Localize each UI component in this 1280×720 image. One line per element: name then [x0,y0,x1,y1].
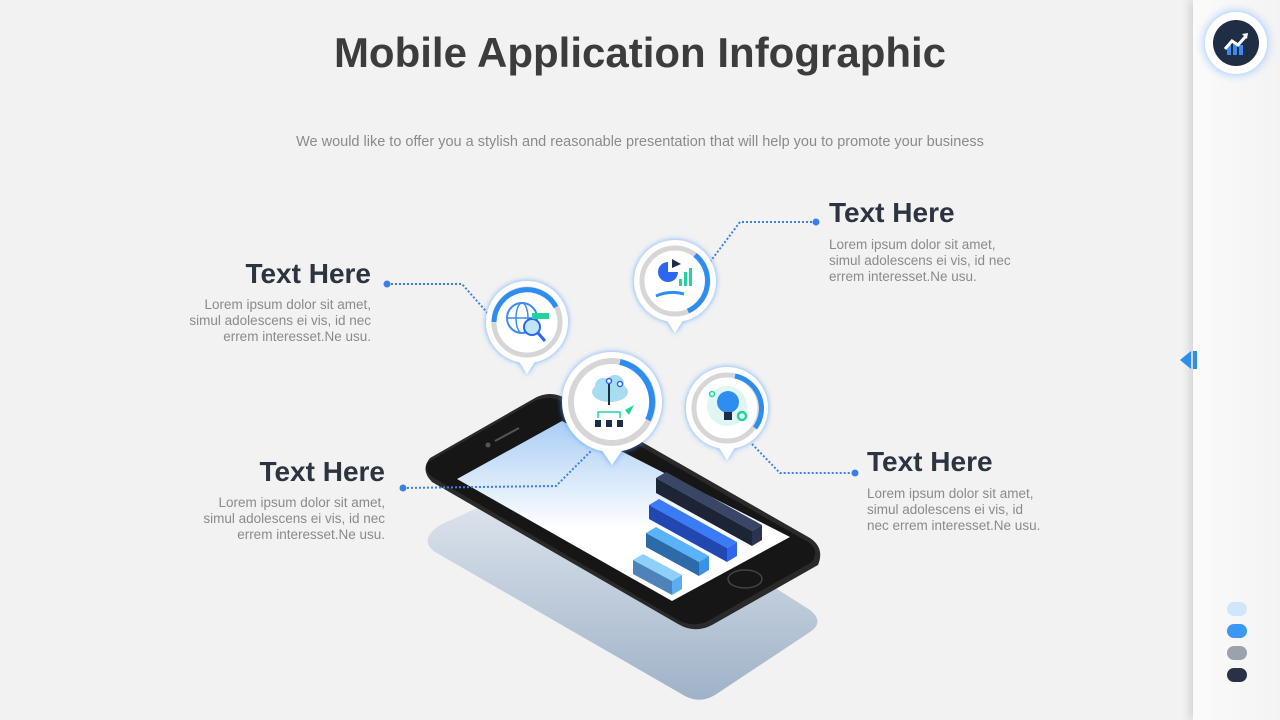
text block: bottom left: Lorem ipsum dolor sit amet, simul adolescens ei vis, id nec errem interesset.Ne usu. [203,495,385,542]
text block: bottom right: Lorem ipsum dolor sit amet, simul adolescens ei vis, id [867,486,1034,517]
sidebar [1193,0,1280,720]
text block: top right: Text Here [829,197,955,228]
connector lines [387,222,855,488]
text block: top left [189,258,371,344]
text block: top left: Text Here [245,258,371,289]
bubble: globe search [486,281,568,374]
arrow: sidebar toggle [1180,351,1197,369]
phone [425,394,820,629]
text block: bottom right [867,446,1040,533]
bubble: cloud network [562,352,662,465]
text block: bottom left: Text Here [259,456,385,487]
text block: bottom right: Text Here [867,446,993,477]
phone shadow [428,466,818,700]
text block: bottom right: nec errem interesset.Ne usu. [867,518,1040,533]
title: Mobile Application Infographic [334,29,946,76]
text block: top right [829,197,1011,284]
text block: top left: Lorem ipsum dolor sit amet, simul adolescens ei vis, id nec errem interesset.Ne usu. [189,297,371,344]
subtitle: We would like to offer you a stylish and reasonable presentation that will help you to promote your business [296,134,984,150]
icon: sidebar chart badge [1205,12,1267,74]
text block: bottom left [203,456,385,542]
bar chart on screen [633,472,762,595]
bubble: light bulb [686,367,768,460]
text block: top right: Lorem ipsum dolor sit amet, simul adolescens ei vis, id nec errem interesset.Ne usu. [829,237,1011,284]
bubble: pie chart [634,240,716,333]
page dots [1227,602,1247,682]
